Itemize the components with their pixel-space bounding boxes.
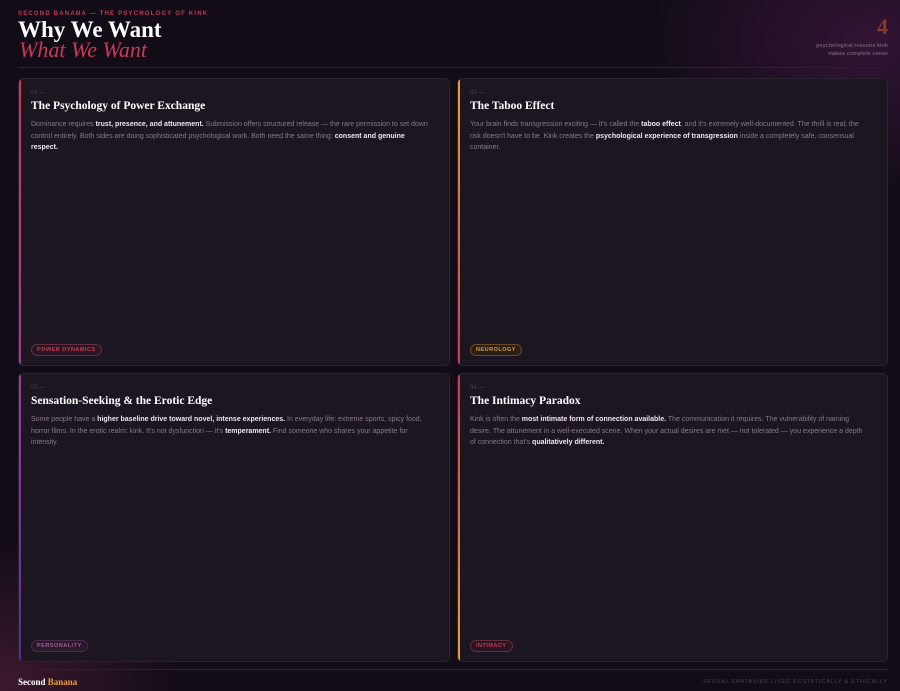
- title: Why We Want: [18, 17, 162, 42]
- panel: sensation: 03 —: [31, 385, 45, 391]
- tag: NEUROLOGY: [476, 347, 516, 353]
- side note with icon: 4: [877, 14, 888, 39]
- text: Your brain finds transgression exciting — it's called the taboo effect, and it's extremely well-documented. The thrill is real; the risk doesn't have to be. Kink creates the psychological experience of transgression inside a completely safe, consensual container.: [470, 121, 859, 151]
- heading: Sensation-Seeking & the Erotic Edge: [31, 395, 212, 407]
- panel: intimacy: [457, 373, 888, 662]
- heading: The Taboo Effect: [470, 100, 554, 112]
- panel: intimacy: 04 —: [470, 385, 484, 391]
- panel: power exchange: [18, 78, 450, 366]
- panel: sensation: [18, 373, 450, 662]
- text: Dominance requires trust, presence, and attunement. Submission offers structured release — the rare permission to set down control entirely. Both sides are doing sophisticated psychological work. Both need the same thing: consent and genuine respect.: [31, 121, 428, 151]
- side note with icon: psychological reasons kink: [816, 43, 888, 49]
- tag: [31, 640, 88, 652]
- side note with icon: [816, 14, 888, 57]
- panel: taboo: [457, 78, 888, 366]
- text: Kink is often the most intimate form of connection available. The communication it requires. The vulnerability of naming desire. The attunement in a well-executed scene. When your actual desires are met — not tolerated — you experience a depth of connection that's qualitatively different.: [470, 416, 862, 446]
- subtitle: What We Want: [19, 37, 147, 62]
- tag: [470, 640, 513, 652]
- footer brand: Second Banana: [18, 677, 77, 687]
- tag: POWER DYNAMICS: [37, 347, 96, 353]
- tag: INTIMACY: [476, 643, 507, 649]
- heading: The Psychology of Power Exchange: [31, 100, 205, 112]
- panel: taboo: 02 —: [470, 90, 484, 96]
- tag: [470, 344, 522, 356]
- footer tagline: SEXUAL FANTASIES LIVED ECSTATICALLY & ETHICALLY: [703, 679, 888, 685]
- kicker: SECOND BANANA — THE PSYCHOLOGY OF KINK: [18, 11, 208, 17]
- heading: The Intimacy Paradox: [470, 395, 581, 407]
- side note with icon: makes complete sense: [828, 51, 888, 57]
- text: Some people have a higher baseline drive toward novel, intense experiences. In everyday life: extreme sports, spicy food, horror films. In the erotic realm: kink. It's not dysfunction — it's temperament. Find someone who shares your appetite for intensity.: [31, 416, 422, 446]
- tag: PERSONALITY: [37, 643, 82, 649]
- panel: power exchange: 01 —: [31, 90, 45, 96]
- tag: [31, 344, 102, 356]
